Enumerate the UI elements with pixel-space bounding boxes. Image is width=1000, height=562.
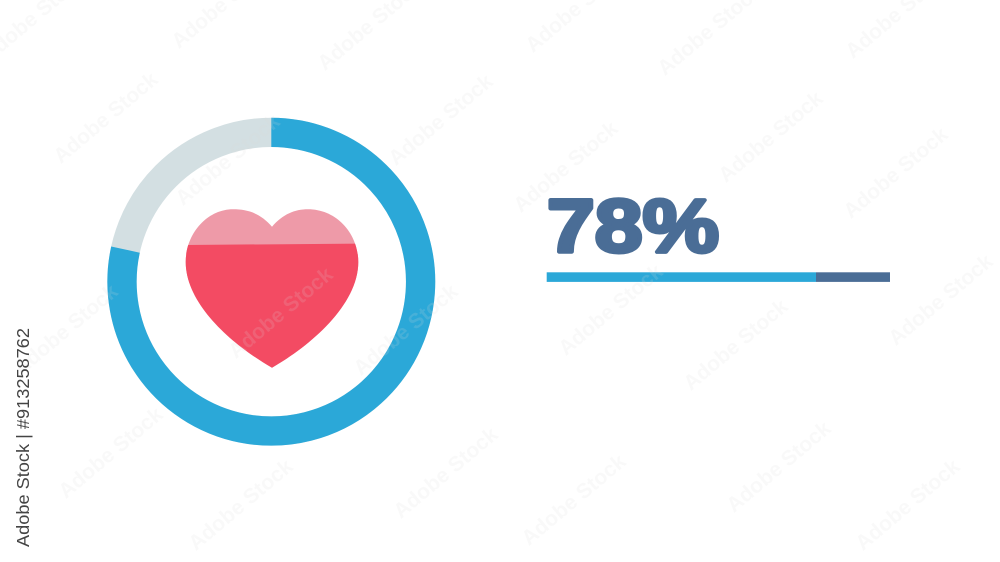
stock watermark pattern: Adobe Stock: [49, 68, 163, 168]
stock watermark pattern: Adobe Stock: [714, 87, 828, 187]
stock watermark pattern: Adobe Stock: [554, 260, 668, 360]
progress bar: [547, 272, 890, 282]
icon: heart filled to 78 percent: [186, 209, 358, 368]
stock watermark pattern: Adobe Stock: [171, 110, 285, 210]
stock watermark pattern: Adobe Stock: [851, 455, 965, 555]
stock watermark pattern: Adobe Stock: [517, 450, 631, 550]
stock watermark pattern: Adobe Stock: [224, 263, 338, 363]
ring track: [122, 132, 421, 431]
stock watermark pattern: Adobe Stock: [722, 417, 836, 517]
stock id label: Adobe Stock | #913258762: [13, 328, 33, 547]
stock watermark pattern: Adobe Stock: [54, 403, 168, 503]
stock watermark pattern: Adobe Stock: [679, 295, 793, 395]
stock watermark pattern: Adobe Stock: [384, 70, 498, 170]
stock watermark pattern: Adobe Stock: [184, 455, 298, 555]
stock watermark pattern: Adobe Stock: [884, 250, 998, 350]
ring progress arc: [122, 132, 421, 431]
stock watermark pattern: Adobe Stock: [839, 123, 953, 223]
donut chart: 78 percent: [122, 132, 421, 431]
stock watermark pattern: Adobe Stock: [509, 117, 623, 217]
stock watermark pattern: Adobe Stock: [389, 423, 503, 523]
percentage value: 78%: [547, 184, 719, 268]
stock watermark pattern: Adobe Stock: [349, 280, 463, 380]
stock watermark pattern: Adobe Stock: [9, 280, 123, 380]
